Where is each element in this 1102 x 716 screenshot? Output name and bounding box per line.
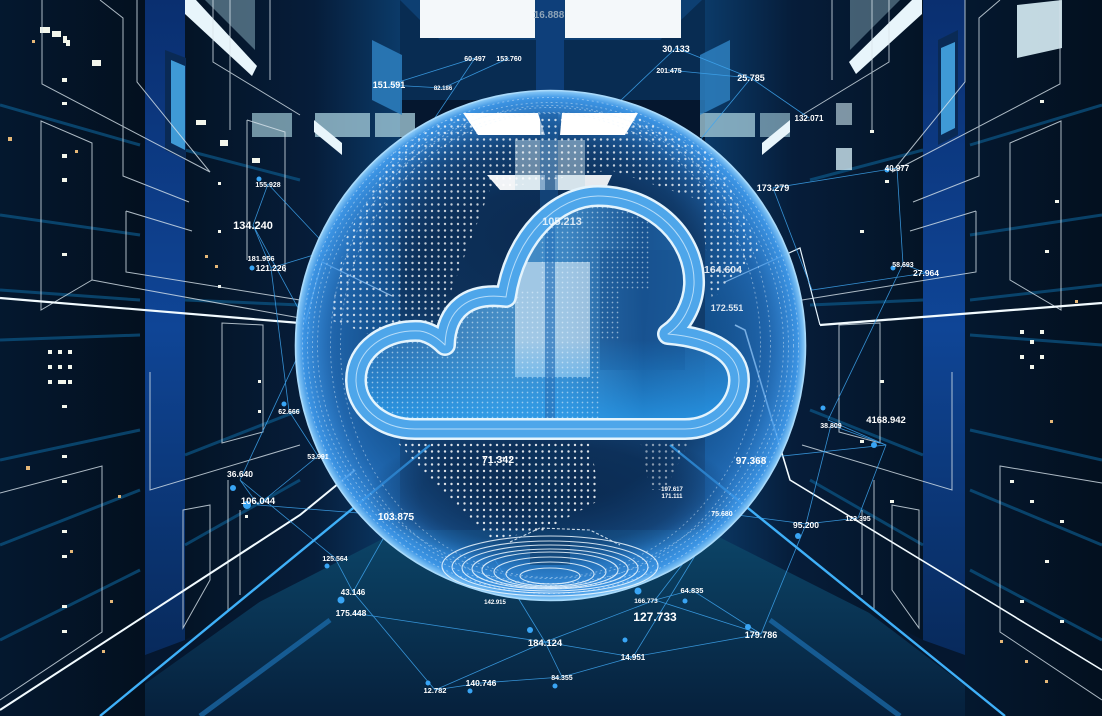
data labels: 132.071 bbox=[795, 114, 824, 123]
south polar ring pattern bbox=[442, 528, 658, 596]
ceiling bbox=[300, 0, 800, 100]
data labels: 155.928 bbox=[255, 182, 281, 189]
data labels: 173.279 bbox=[757, 183, 789, 193]
data labels: 181.956 bbox=[247, 254, 275, 263]
data labels: 166.773 bbox=[634, 598, 658, 605]
data labels: 64.835 bbox=[681, 586, 703, 595]
left inner racks bbox=[185, 0, 400, 640]
network mesh bbox=[240, 48, 926, 690]
data labels: 95.200 bbox=[793, 520, 819, 530]
circuit outlines on left racks bbox=[0, 0, 300, 700]
data labels: 106.044 bbox=[241, 496, 276, 507]
rack LEDs bbox=[40, 27, 1064, 633]
glowing perspective lines bbox=[0, 248, 1102, 716]
circuit outlines on right racks bbox=[802, 0, 1102, 700]
cloud icon bbox=[356, 196, 739, 430]
data labels: 4168.942 bbox=[866, 415, 906, 426]
cloud bevel outline bbox=[356, 196, 739, 429]
data labels: 197.617 bbox=[661, 487, 684, 493]
data labels: 105.213 bbox=[542, 216, 582, 228]
data labels: 134.240 bbox=[233, 220, 273, 232]
data labels: 103.875 bbox=[378, 512, 415, 523]
data labels: 84.355 bbox=[551, 675, 573, 682]
left racks bbox=[0, 0, 145, 716]
floor bbox=[100, 530, 1005, 716]
globe latitude hatch rings bbox=[302, 98, 798, 594]
data labels: 184.124 bbox=[528, 638, 563, 649]
right racks bbox=[965, 0, 1102, 716]
cloud body bbox=[356, 196, 739, 429]
globe dotted continents bbox=[330, 118, 760, 540]
reflected ceiling lights bbox=[360, 110, 740, 565]
data labels: 172.551 bbox=[711, 303, 743, 313]
data labels: 142.915 bbox=[484, 600, 506, 606]
right inner racks bbox=[705, 0, 923, 640]
data labels: 175.448 bbox=[336, 608, 367, 618]
data labels: 53.991 bbox=[307, 454, 329, 461]
data labels: 201.475 bbox=[656, 68, 682, 75]
data labels: 121.226 bbox=[256, 263, 287, 273]
data labels: 82.186 bbox=[434, 86, 453, 92]
data labels: 14.951 bbox=[621, 653, 646, 662]
data labels: 40.977 bbox=[885, 164, 910, 173]
network nodes bbox=[230, 168, 896, 694]
sphere tinted glass bbox=[296, 90, 806, 600]
data labels: 75.680 bbox=[711, 511, 733, 518]
data labels: 123.395 bbox=[845, 516, 871, 523]
left pillar bbox=[145, 0, 185, 655]
data labels: 60.497 bbox=[464, 56, 486, 63]
rack shelf streaks bbox=[0, 105, 1102, 640]
data labels bbox=[227, 10, 939, 695]
data labels: 127.733 bbox=[633, 610, 677, 624]
cloud interior reflections bbox=[367, 207, 728, 418]
data labels: 71.342 bbox=[482, 454, 514, 466]
data labels: 153.760 bbox=[496, 56, 522, 63]
data labels: 38.809 bbox=[820, 423, 842, 430]
globe sphere bbox=[296, 90, 806, 600]
data labels: 12.782 bbox=[424, 686, 446, 695]
right pillar bbox=[923, 0, 965, 655]
sphere rim bbox=[296, 90, 806, 600]
data labels: 25.785 bbox=[737, 73, 765, 83]
data labels: 62.666 bbox=[278, 409, 300, 416]
data labels: 97.368 bbox=[736, 456, 767, 467]
data labels: 151.591 bbox=[373, 80, 405, 90]
data labels: 179.786 bbox=[745, 630, 777, 640]
data labels: 16.888 bbox=[534, 10, 565, 21]
data labels: 125.564 bbox=[322, 556, 348, 563]
data labels: 171.111 bbox=[661, 494, 683, 500]
data labels: 58.693 bbox=[892, 262, 914, 269]
upper side panels and lights bbox=[185, 0, 1062, 170]
data labels: 140.746 bbox=[466, 678, 497, 688]
wall screens bbox=[165, 30, 958, 160]
data labels: 36.640 bbox=[227, 469, 253, 479]
data labels: 164.604 bbox=[704, 264, 742, 276]
data labels: 27.964 bbox=[913, 268, 939, 278]
data labels: 30.133 bbox=[662, 44, 690, 54]
data labels: 43.146 bbox=[341, 588, 366, 597]
